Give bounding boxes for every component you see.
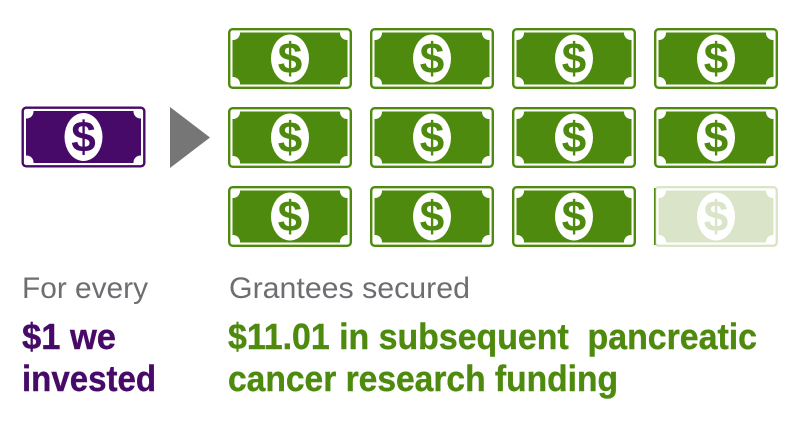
text: $1 we invested [22,316,156,399]
text: $1 we invested: invested [22,358,156,399]
icon: green bill 8: $ [704,114,728,162]
text: funding statement: cancer research funding [228,358,618,399]
icon: green bill 9: $ [278,192,302,242]
icon: green bill 10: $ [420,192,444,242]
text: for every: For every [22,272,148,305]
text: grantees secured: Grantees secured [229,272,470,305]
icon: green bill 10 [368,184,496,249]
icon: purple dollar bill: $ [71,113,96,162]
icon: green bill 11 [510,184,638,249]
icon: green bill 5 [226,105,354,170]
icon: green bill 2: $ [420,34,444,84]
icon: green bill 5: $ [278,114,302,162]
icon: green bill 7 [510,105,638,170]
icon: green bill 3: $ [562,34,586,84]
text: funding statement: $11.01 in subsequent pancreatic [228,316,757,357]
icon: green bill 9 [226,184,354,249]
icon: green bill 6 [368,105,496,170]
text: $1 we invested: $1 we [22,316,116,357]
icon: green bill 8 [652,105,780,170]
green bills grid [226,26,780,249]
icon: green bill 4 [652,26,780,91]
icon: green bill 1: $ [278,34,302,84]
icon: green bill 11: $ [562,192,586,242]
icon: green bill 2 [368,26,496,91]
icon: green bill 1 [226,26,354,91]
icon: green bill 6: $ [420,114,444,162]
text: funding statement [228,316,757,399]
icon: green bill 7: $ [562,114,586,162]
icon: faded partial bill [652,184,780,249]
icon: faded partial bill: $ [704,192,728,242]
icon: green bill 3 [510,26,638,91]
icon: purple dollar bill [20,104,148,170]
icon: green bill 4: $ [704,34,728,84]
arrow [170,107,210,168]
